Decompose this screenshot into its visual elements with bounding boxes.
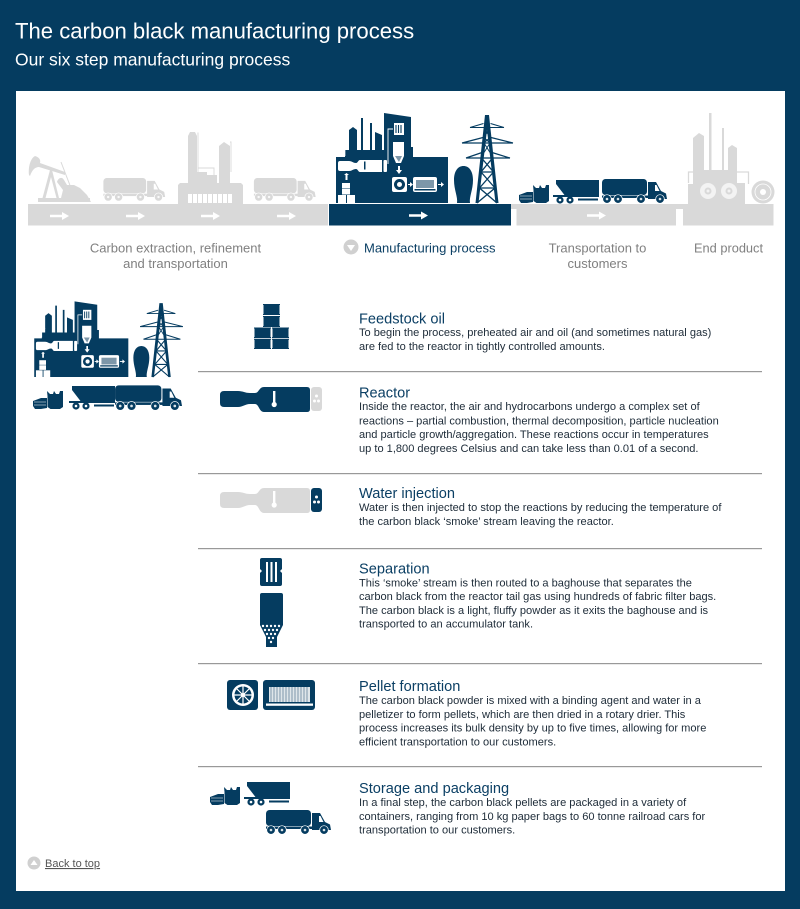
icon: barrels — [254, 304, 289, 349]
icon: overview vehicles — [33, 385, 182, 410]
body: containers, ranging from 10 kg paper bags to 60 tonne railroad cars for — [359, 811, 706, 823]
body: To begin the process, preheated air and oil (and sometimes natural gas) — [359, 327, 711, 339]
body: efficient transportation to our customers. — [359, 736, 556, 748]
connector strip — [511, 204, 683, 209]
body: the carbon black ‘smoke’ stream leaving the reactor. — [359, 516, 614, 528]
icon: overview plant — [34, 301, 183, 377]
body: This ‘smoke’ stream is then routed to a baghouse that separates the — [359, 578, 692, 590]
icon: transport vehicles — [519, 179, 667, 204]
body: carbon black from the reactor tail gas using hundreds of fabric filter bags. — [359, 591, 716, 603]
label: transportation: Transportation to — [549, 240, 646, 256]
step: feedstock oil — [254, 304, 711, 353]
label: transportation: customers — [568, 256, 628, 271]
process strip: upstream grey band — [28, 204, 328, 226]
label: carbon extraction: Carbon extraction, refinement — [90, 240, 262, 256]
heading: Reactor — [359, 386, 410, 402]
icon: water injection — [220, 488, 322, 513]
body: transported to an accumulator tank. — [359, 618, 533, 630]
icon: manufacturing plant and pylon — [336, 113, 513, 203]
body: The carbon black powder is mixed with a binding agent and water in a — [359, 695, 702, 707]
body: Water is then injected to stop the reactions by reducing the temperature of — [359, 502, 722, 514]
process strip: transportation band — [516, 204, 676, 226]
body: reactions – partial combustion, thermal decomposition, particle nucleation — [359, 416, 719, 428]
link text: Back to top — [45, 858, 100, 870]
heading: Storage and packaging — [359, 781, 509, 797]
icon: grey tanker truck 2 — [254, 178, 316, 201]
body: process increases its bulk density by up to five times, allowing for more — [359, 722, 706, 734]
icon: down marker — [344, 240, 358, 254]
heading: Water injection — [359, 486, 455, 502]
icon: grey tanker truck 1 — [103, 178, 165, 201]
process strip: end product band — [683, 204, 774, 226]
step: separation — [260, 558, 716, 647]
heading: Separation — [359, 562, 430, 578]
icon: bags, tipper and truck — [210, 782, 331, 834]
icon: up marker — [28, 856, 40, 870]
icon: grey refinery — [178, 132, 243, 204]
title: The carbon black manufacturing process — [15, 18, 414, 44]
icon: oil pumpjack — [29, 156, 91, 202]
body: The carbon black is a light, fluffy powder as it exits the baghouse and is — [359, 605, 709, 617]
process strip: manufacturing navy band — [329, 204, 511, 226]
body: are fed to the reactor in tightly controlled amounts. — [359, 341, 605, 353]
label: manufacturing process: Manufacturing process — [364, 240, 496, 256]
body: and particle growth/aggregation. These reactions occur in temperatures — [359, 429, 709, 441]
step: water injection — [220, 486, 722, 528]
icon: end product plant and tyre — [688, 113, 774, 204]
icon: pelletizer and drier — [227, 680, 315, 710]
subtitle: Our six step manufacturing process — [15, 50, 291, 70]
body: In a final step, the carbon black pellets are packaged in a variety of — [359, 797, 687, 809]
step: storage and packaging — [210, 781, 706, 836]
back to top link — [28, 856, 100, 870]
body: pelletizer to form pellets, which are then dried in a rotary drier. This — [359, 709, 686, 721]
label: end product: End product — [694, 240, 763, 256]
body: up to 1,800 degrees Celsius and can take less than 0.01 of a second. — [359, 443, 698, 455]
step: pellet formation — [227, 679, 706, 748]
label: carbon extraction: and transportation — [123, 256, 228, 271]
icon: baghouse and hopper — [260, 558, 283, 647]
icon: reactor — [220, 387, 322, 412]
body: transportation to our customers. — [359, 824, 515, 836]
body: Inside the reactor, the air and hydrocarbons undergo a complex set of — [359, 401, 701, 413]
step: reactor — [220, 386, 719, 455]
heading: Feedstock oil — [359, 312, 445, 328]
heading: Pellet formation — [359, 679, 460, 695]
